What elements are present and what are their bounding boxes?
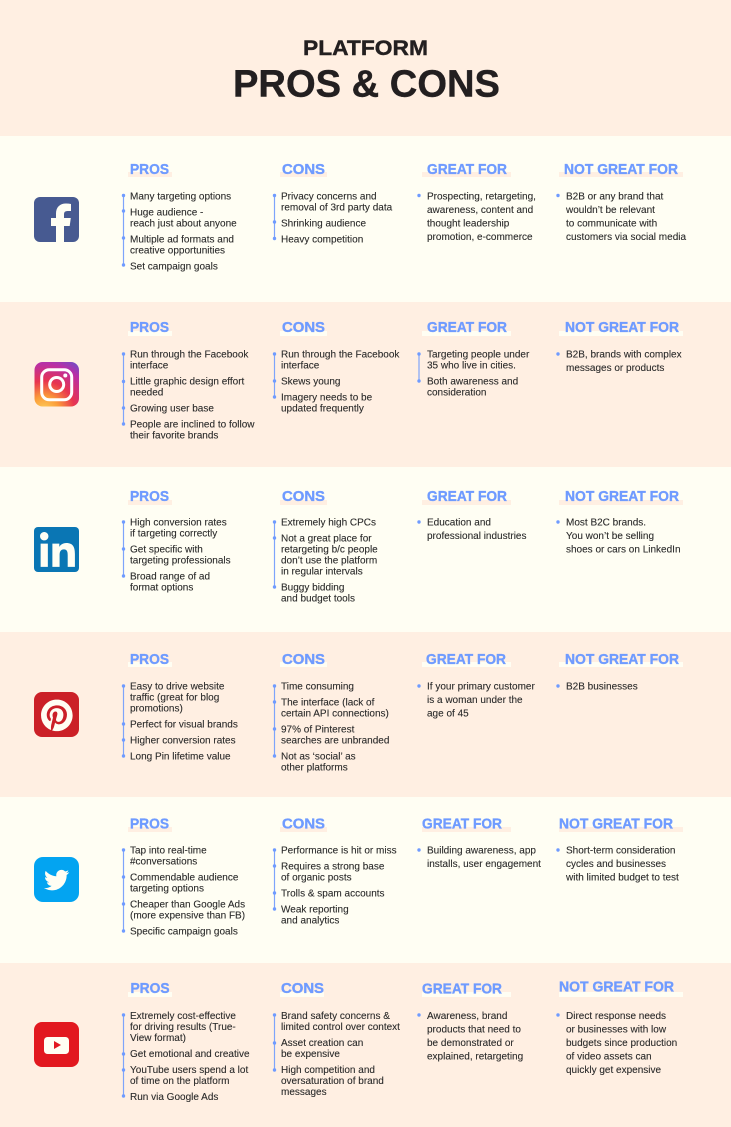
YouTube cons xyxy=(273,981,400,1098)
LinkedIn pros: Broad range of ad xyxy=(130,572,210,582)
Instagram not great for: NOT GREAT FOR xyxy=(565,320,679,336)
Facebook cons: Shrinking audience xyxy=(281,218,366,230)
Facebook not great for: customers via social media xyxy=(566,232,686,243)
YouTube cons: CONS xyxy=(281,981,324,997)
Twitter pros: targeting options xyxy=(130,884,204,894)
Facebook not great for xyxy=(556,162,686,243)
LinkedIn cons: don’t use the platform xyxy=(281,556,377,566)
YouTube great for: GREAT FOR xyxy=(422,982,502,998)
Facebook great for: thought leadership xyxy=(427,218,510,230)
icon: LinkedIn xyxy=(34,527,79,572)
Pinterest not great for xyxy=(556,652,683,692)
LinkedIn pros: Get specific with xyxy=(130,544,203,556)
Twitter great for: GREAT FOR xyxy=(422,816,502,832)
panel: Twitter xyxy=(0,797,731,963)
Pinterest great for: GREAT FOR xyxy=(426,652,506,668)
Twitter cons xyxy=(273,816,397,926)
Facebook pros: PROS xyxy=(130,162,169,178)
LinkedIn not great for: Most B2C brands. xyxy=(566,518,646,528)
YouTube cons: Asset creation can xyxy=(281,1038,363,1049)
Pinterest pros: Higher conversion rates xyxy=(130,736,236,746)
LinkedIn pros: if targeting correctly xyxy=(130,528,217,540)
Instagram great for: Both awareness and xyxy=(427,376,518,388)
title xyxy=(233,37,500,106)
Twitter cons: CONS xyxy=(282,816,325,832)
Instagram cons: Skews young xyxy=(281,376,340,388)
LinkedIn cons xyxy=(273,489,378,604)
Pinterest cons: certain API connections) xyxy=(281,708,389,720)
LinkedIn great for: GREAT FOR xyxy=(427,489,507,505)
YouTube pros: View format) xyxy=(130,1033,186,1044)
LinkedIn cons: Buggy bidding xyxy=(281,582,344,594)
YouTube not great for: of video assets can xyxy=(566,1052,652,1062)
Pinterest pros: Long Pin lifetime value xyxy=(130,752,231,762)
LinkedIn great for: Education and xyxy=(427,518,491,528)
YouTube pros: Get emotional and creative xyxy=(130,1049,250,1060)
LinkedIn pros: format options xyxy=(130,582,193,594)
Twitter cons: and analytics xyxy=(281,916,339,926)
Facebook not great for: wouldn’t be relevant xyxy=(565,205,655,216)
YouTube cons: messages xyxy=(281,1087,327,1098)
Twitter pros: PROS xyxy=(130,816,169,832)
YouTube great for: Awareness, brand xyxy=(427,1011,507,1022)
YouTube not great for: budgets since production xyxy=(566,1038,677,1049)
Twitter pros: Cheaper than Google Ads xyxy=(130,900,245,910)
Pinterest pros: PROS xyxy=(130,652,169,668)
Instagram cons xyxy=(273,320,400,414)
Instagram great for: consideration xyxy=(427,388,486,398)
YouTube great for: explained, retargeting xyxy=(427,1052,523,1062)
Instagram great for: 35 who live in cities. xyxy=(427,360,516,372)
icon: Pinterest xyxy=(34,692,79,737)
title: PROS & CONS xyxy=(233,64,500,106)
Instagram not great for: B2B, brands with complex xyxy=(566,350,682,360)
Instagram cons: Run through the Facebook xyxy=(281,350,400,360)
Twitter pros xyxy=(122,816,245,938)
Facebook cons xyxy=(273,162,393,246)
Twitter pros: Commendable audience xyxy=(130,872,239,884)
Facebook great for: GREAT FOR xyxy=(427,162,507,178)
Pinterest cons: 97% of Pinterest xyxy=(281,724,355,736)
Twitter pros: Specific campaign goals xyxy=(130,926,238,938)
Twitter great for: Building awareness, app xyxy=(427,846,536,856)
YouTube not great for: NOT GREAT FOR xyxy=(559,980,675,996)
Pinterest great for: If your primary customer xyxy=(427,682,535,692)
Facebook cons: CONS xyxy=(282,162,325,178)
Facebook great for: Prospecting, retargeting, xyxy=(427,192,536,202)
LinkedIn pros: targeting professionals xyxy=(130,556,231,566)
YouTube pros: of time on the platform xyxy=(130,1076,230,1087)
Pinterest cons: searches are unbranded xyxy=(281,736,389,746)
YouTube not great for: quickly get expensive xyxy=(566,1065,661,1076)
icon: Facebook xyxy=(34,197,79,242)
Pinterest pros: promotions) xyxy=(130,704,183,714)
Twitter cons: of organic posts xyxy=(281,872,352,884)
Instagram not great for xyxy=(556,320,683,374)
YouTube pros: for driving results (True- xyxy=(130,1022,236,1033)
Twitter great for: installs, user engagement xyxy=(427,859,541,870)
Pinterest cons: Time consuming xyxy=(281,682,354,692)
panel: Facebook xyxy=(0,136,731,302)
Facebook cons: Heavy competition xyxy=(281,234,363,246)
Pinterest cons: CONS xyxy=(282,652,325,668)
Facebook not great for: B2B or any brand that xyxy=(566,192,664,202)
Facebook not great for: NOT GREAT FOR xyxy=(564,162,678,178)
Instagram pros: their favorite brands xyxy=(130,430,218,442)
YouTube not great for: Direct response needs xyxy=(566,1011,666,1022)
Pinterest cons xyxy=(273,652,389,774)
LinkedIn not great for: shoes or cars on LinkedIn xyxy=(566,544,681,556)
Facebook pros: Set campaign goals xyxy=(130,262,218,272)
Twitter not great for xyxy=(556,816,683,884)
Instagram pros: interface xyxy=(130,360,169,372)
Twitter pros: #conversations xyxy=(130,856,197,868)
Twitter pros: (more expensive than FB) xyxy=(130,910,245,922)
Instagram pros xyxy=(122,320,255,442)
LinkedIn cons: Extremely high CPCs xyxy=(281,518,376,528)
Facebook great for: awareness, content and xyxy=(427,205,533,216)
YouTube not great for xyxy=(556,980,683,1076)
Instagram cons: updated frequently xyxy=(281,404,364,414)
icon: Twitter xyxy=(34,857,79,902)
YouTube cons: limited control over context xyxy=(281,1022,400,1033)
Pinterest not great for: B2B businesses xyxy=(566,682,638,692)
Pinterest not great for: NOT GREAT FOR xyxy=(565,652,679,668)
YouTube cons: Brand safety concerns & xyxy=(281,1011,390,1022)
YouTube not great for: or businesses with low xyxy=(566,1024,667,1036)
title: PLATFORM xyxy=(303,37,428,60)
Instagram great for xyxy=(417,320,530,398)
panel: YouTube xyxy=(34,980,683,1103)
icon: Instagram xyxy=(34,362,79,406)
Instagram great for: GREAT FOR xyxy=(427,320,507,336)
Facebook pros: Huge audience - xyxy=(130,208,203,218)
LinkedIn pros xyxy=(122,489,231,594)
Pinterest great for: age of 45 xyxy=(427,708,469,720)
LinkedIn not great for: NOT GREAT FOR xyxy=(565,489,679,505)
LinkedIn not great for xyxy=(556,489,683,556)
Instagram pros: Growing user base xyxy=(130,404,214,414)
Pinterest pros xyxy=(122,652,238,762)
Instagram pros: Little graphic design effort xyxy=(130,376,245,388)
Facebook pros: Multiple ad formats and xyxy=(130,234,234,246)
LinkedIn cons: retargeting b/c people xyxy=(281,544,378,556)
Instagram cons: Imagery needs to be xyxy=(281,392,373,404)
YouTube pros: PROS xyxy=(130,981,170,997)
Twitter cons: Weak reporting xyxy=(281,904,349,916)
LinkedIn great for: professional industries xyxy=(427,531,526,542)
Facebook pros: Many targeting options xyxy=(130,192,231,202)
Instagram pros: needed xyxy=(130,388,163,398)
Pinterest great for xyxy=(417,652,535,720)
LinkedIn cons: CONS xyxy=(282,489,325,505)
Pinterest cons: Not as ‘social’ as xyxy=(281,752,356,762)
YouTube cons: oversaturation of brand xyxy=(281,1076,384,1087)
panel: Pinterest xyxy=(34,652,683,774)
YouTube great for: products that need to xyxy=(427,1024,521,1036)
Facebook great for xyxy=(417,162,536,243)
Twitter not great for: Short-term consideration xyxy=(566,846,676,856)
LinkedIn cons: Not a great place for xyxy=(281,534,372,544)
LinkedIn cons: in regular intervals xyxy=(281,566,363,578)
Facebook not great for: to communicate with xyxy=(566,218,657,230)
LinkedIn pros: PROS xyxy=(130,489,169,505)
panel: Instagram xyxy=(34,320,683,442)
Instagram great for: Targeting people under xyxy=(427,350,530,360)
Instagram cons: CONS xyxy=(282,320,325,336)
Pinterest great for: is a woman under the xyxy=(427,695,523,706)
LinkedIn pros: High conversion rates xyxy=(130,518,227,528)
Pinterest pros: Easy to drive website xyxy=(130,682,225,692)
LinkedIn great for xyxy=(417,489,526,542)
Twitter cons: Trolls & spam accounts xyxy=(281,888,385,900)
Instagram pros: Run through the Facebook xyxy=(130,350,249,360)
YouTube great for: be demonstrated or xyxy=(427,1038,514,1049)
Pinterest cons: The interface (lack of xyxy=(281,698,375,708)
Facebook pros xyxy=(122,162,237,272)
Facebook pros: creative opportunities xyxy=(130,246,225,256)
YouTube cons: High competition and xyxy=(281,1065,375,1076)
Twitter not great for: with limited budget to test xyxy=(565,872,679,884)
Twitter not great for: cycles and businesses xyxy=(566,859,666,870)
Instagram not great for: messages or products xyxy=(566,363,664,374)
icon: YouTube xyxy=(34,1022,79,1067)
Facebook cons: Privacy concerns and xyxy=(281,192,377,202)
Facebook cons: removal of 3rd party data xyxy=(281,202,393,214)
YouTube great for xyxy=(417,982,523,1062)
Twitter not great for: NOT GREAT FOR xyxy=(559,816,673,832)
YouTube pros xyxy=(122,981,250,1103)
Facebook pros: reach just about anyone xyxy=(130,218,237,230)
Instagram cons: interface xyxy=(281,360,320,372)
LinkedIn cons: and budget tools xyxy=(281,594,355,604)
Twitter great for xyxy=(417,816,541,870)
Pinterest cons: other platforms xyxy=(281,762,348,774)
Pinterest pros: Perfect for visual brands xyxy=(130,720,238,730)
Pinterest pros: traffic (great for blog xyxy=(130,692,219,704)
YouTube pros: Run via Google Ads xyxy=(130,1092,218,1103)
YouTube cons: be expensive xyxy=(281,1049,340,1060)
YouTube pros: Extremely cost-effective xyxy=(130,1011,236,1022)
panel: LinkedIn xyxy=(0,467,731,632)
Instagram pros: PROS xyxy=(130,320,169,336)
Twitter pros: Tap into real-time xyxy=(130,846,207,856)
Twitter cons: Performance is hit or miss xyxy=(281,846,397,856)
Twitter cons: Requires a strong base xyxy=(281,862,385,872)
LinkedIn not great for: You won’t be selling xyxy=(566,531,654,542)
YouTube pros: YouTube users spend a lot xyxy=(130,1065,248,1076)
Facebook great for: promotion, e-commerce xyxy=(427,232,533,243)
Instagram pros: People are inclined to follow xyxy=(130,420,255,430)
